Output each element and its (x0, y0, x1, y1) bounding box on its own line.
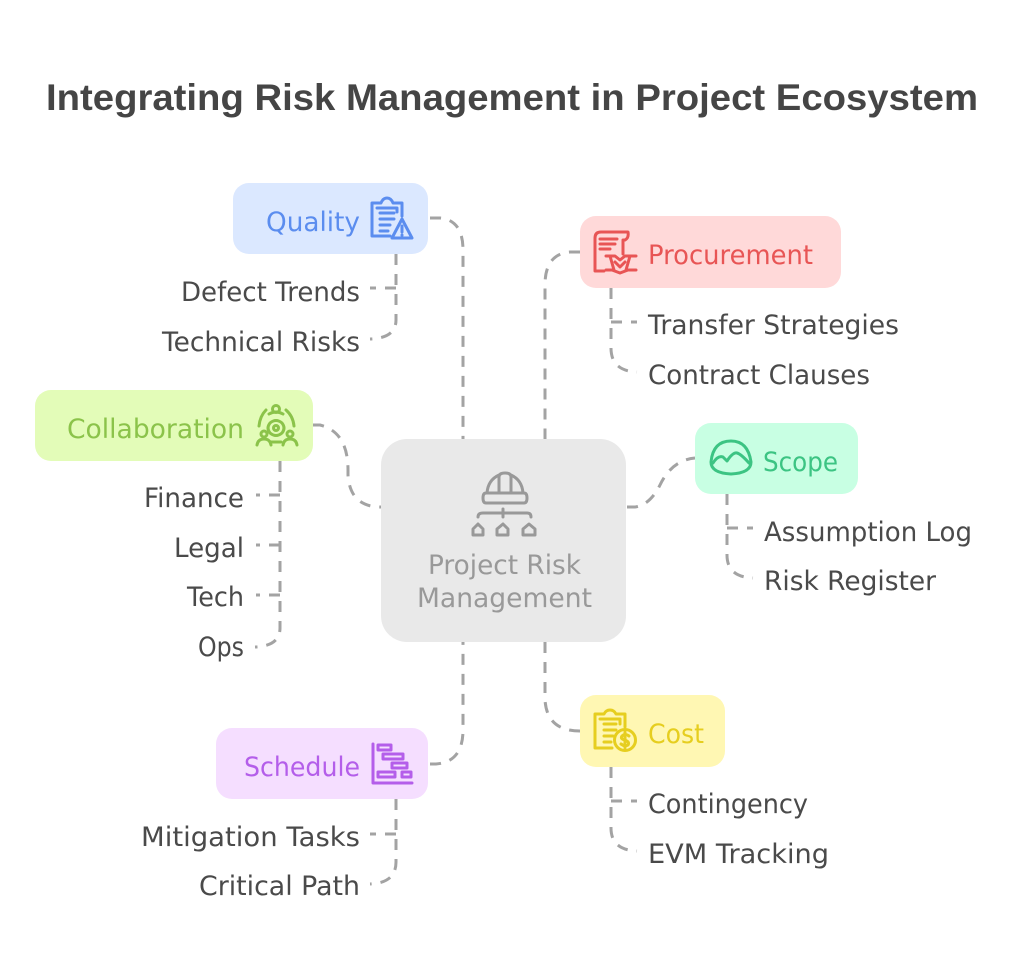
cost branches (611, 767, 637, 851)
quality box (233, 183, 428, 254)
connector: center to procurement (545, 252, 580, 440)
procurement branches (611, 288, 637, 372)
item: Risk Register: Risk Register (764, 566, 937, 597)
scope label: Scope (763, 447, 838, 478)
connector: center to scope (627, 458, 695, 507)
item: Contract Clauses: Contract Clauses (648, 360, 870, 391)
connector: center to schedule (430, 642, 463, 764)
icon: team around a flower (257, 406, 297, 445)
item: Technical Risks: Technical Risks (161, 327, 360, 358)
connector: center to quality (430, 218, 463, 440)
center box (381, 439, 626, 642)
icon: hard hat with hierarchy (473, 473, 535, 535)
panel: cost (580, 695, 829, 870)
panel: center node (381, 439, 626, 642)
item: EVM Tracking: EVM Tracking (648, 839, 829, 870)
title: Integrating Risk Management in Project Ecosystem (46, 77, 978, 118)
item: Finance: Finance (144, 483, 244, 514)
item: Tech: Tech (186, 582, 244, 613)
procurement box (580, 216, 841, 288)
panel: quality (161, 183, 428, 358)
icon: gantt chart (373, 744, 412, 783)
item: Assumption Log: Assumption Log (764, 517, 972, 548)
collaboration branches (255, 461, 280, 647)
schedule branches (370, 799, 396, 884)
icon: mountain dome (711, 441, 751, 474)
center label line 1: Project Risk (428, 550, 581, 581)
item: Ops: Ops (198, 632, 244, 663)
icon: clipboard with warning (372, 198, 412, 238)
panel: procurement (580, 216, 899, 391)
schedule box (216, 728, 428, 799)
panel: schedule (141, 728, 428, 902)
item: Contingency: Contingency (648, 789, 808, 820)
cost label: Cost (648, 719, 704, 750)
connector: center to collaboration (313, 425, 381, 507)
item: Mitigation Tasks: Mitigation Tasks (141, 822, 360, 853)
panel: scope (695, 423, 972, 597)
item: Defect Trends: Defect Trends (181, 277, 360, 308)
cost box (580, 695, 725, 767)
center label line 2: Management (417, 583, 592, 614)
procurement label: Procurement (648, 240, 813, 271)
collaboration label: Collaboration (67, 414, 244, 445)
icon: contract handshake (595, 232, 636, 273)
schedule label: Schedule (244, 752, 360, 783)
item: Legal: Legal (174, 533, 244, 564)
panel: collaboration (35, 390, 313, 663)
icon: clipboard with dollar coin (595, 710, 636, 750)
connector: center to cost (545, 642, 580, 731)
scope branches (727, 494, 753, 578)
quality branches (370, 254, 396, 339)
scope box (695, 423, 858, 494)
collaboration box (35, 390, 313, 461)
quality label: Quality (266, 207, 360, 238)
item: Critical Path: Critical Path (199, 871, 360, 902)
item: Transfer Strategies: Transfer Strategies (647, 310, 899, 341)
